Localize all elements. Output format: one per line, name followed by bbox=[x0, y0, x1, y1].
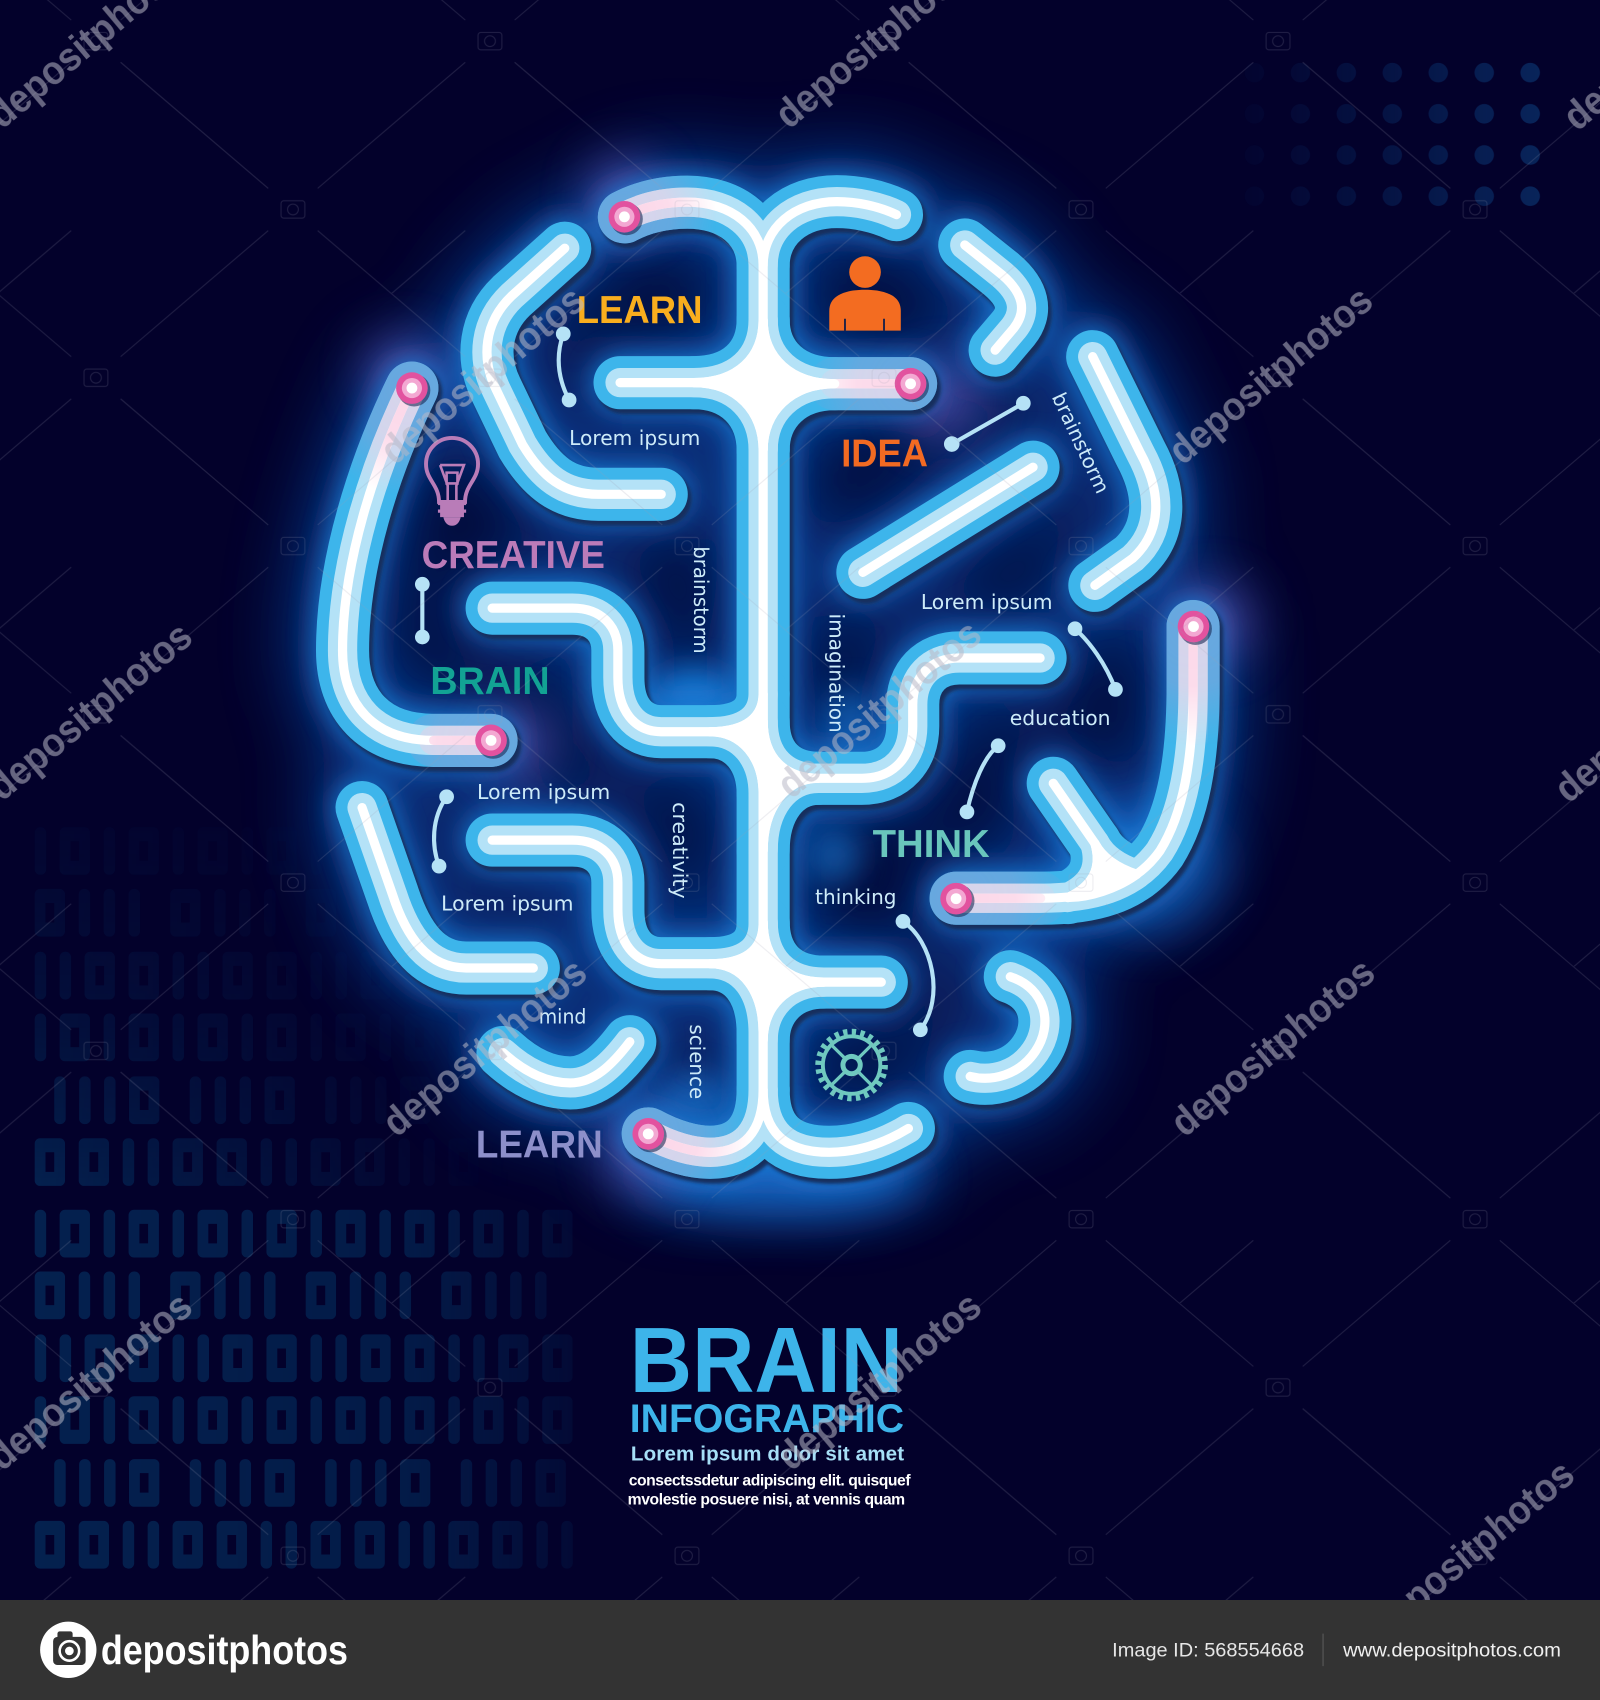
label: IDEA: IDEA bbox=[841, 433, 928, 476]
small labels: creativity bbox=[668, 802, 692, 899]
connector lines bbox=[415, 327, 1123, 1037]
image id: Image ID: 568554668 bbox=[1112, 1639, 1304, 1661]
watermark text: depositphotos bbox=[769, 1284, 990, 1479]
small labels: imagination bbox=[824, 614, 848, 733]
label: LEARN (top): LEARN bbox=[577, 289, 702, 332]
title: BRAIN: BRAIN bbox=[630, 1308, 903, 1412]
binary code pattern bbox=[35, 827, 573, 1569]
small labels: science bbox=[685, 1024, 709, 1099]
description bbox=[628, 1473, 911, 1509]
icon: light bulb bbox=[426, 438, 478, 526]
footer logo text: depositphotos bbox=[101, 1627, 348, 1673]
footer bar bbox=[0, 1600, 1600, 1700]
watermark text: depositphotos bbox=[1162, 950, 1383, 1145]
pink nodes bbox=[396, 201, 1212, 1152]
dot matrix bbox=[1291, 62, 1540, 206]
purple halos bbox=[366, 158, 1251, 1191]
small labels: Lorem ipsum bbox=[569, 426, 700, 450]
watermark text: depositphotos bbox=[374, 950, 595, 1145]
label: BRAIN: BRAIN bbox=[430, 660, 550, 703]
icon: gear bbox=[819, 1033, 884, 1098]
tagline: Lorem ipsum dolor sit amet bbox=[631, 1443, 904, 1466]
small labels: education bbox=[1010, 706, 1111, 730]
label: THINK: THINK bbox=[873, 823, 990, 866]
small labels: mind bbox=[539, 1004, 586, 1028]
description: mvolestie posuere nisi, at vennis quam bbox=[628, 1492, 905, 1509]
small labels: Lorem ipsum bbox=[477, 780, 610, 804]
website: www.depositphotos.com bbox=[1342, 1639, 1561, 1661]
white junctions bbox=[694, 320, 1137, 1041]
label: CREATIVE: CREATIVE bbox=[422, 534, 605, 577]
footer logo icon bbox=[40, 1622, 96, 1678]
small labels: Lorem ipsum bbox=[921, 590, 1053, 614]
title block bbox=[628, 1308, 911, 1509]
description: consectssdetur adipiscing elit. quisquef bbox=[629, 1473, 911, 1490]
icon: person bbox=[829, 256, 901, 331]
watermark text: depositphotos bbox=[1362, 1452, 1583, 1647]
small labels: thinking bbox=[815, 885, 896, 909]
small labels: brainstorm bbox=[689, 546, 713, 654]
small labels: brainstorm bbox=[1047, 389, 1115, 497]
small labels bbox=[441, 389, 1115, 1099]
watermark text: depositphotos bbox=[372, 278, 593, 473]
label: LEARN (bottom): LEARN bbox=[476, 1124, 603, 1167]
subtitle: INFOGRAPHIC: INFOGRAPHIC bbox=[630, 1397, 904, 1441]
watermark text: depositphotos bbox=[1160, 278, 1381, 473]
small labels: Lorem ipsum bbox=[441, 892, 573, 916]
brain neon tubes bbox=[343, 158, 1251, 1217]
watermark text: depositphotos bbox=[769, 612, 990, 807]
